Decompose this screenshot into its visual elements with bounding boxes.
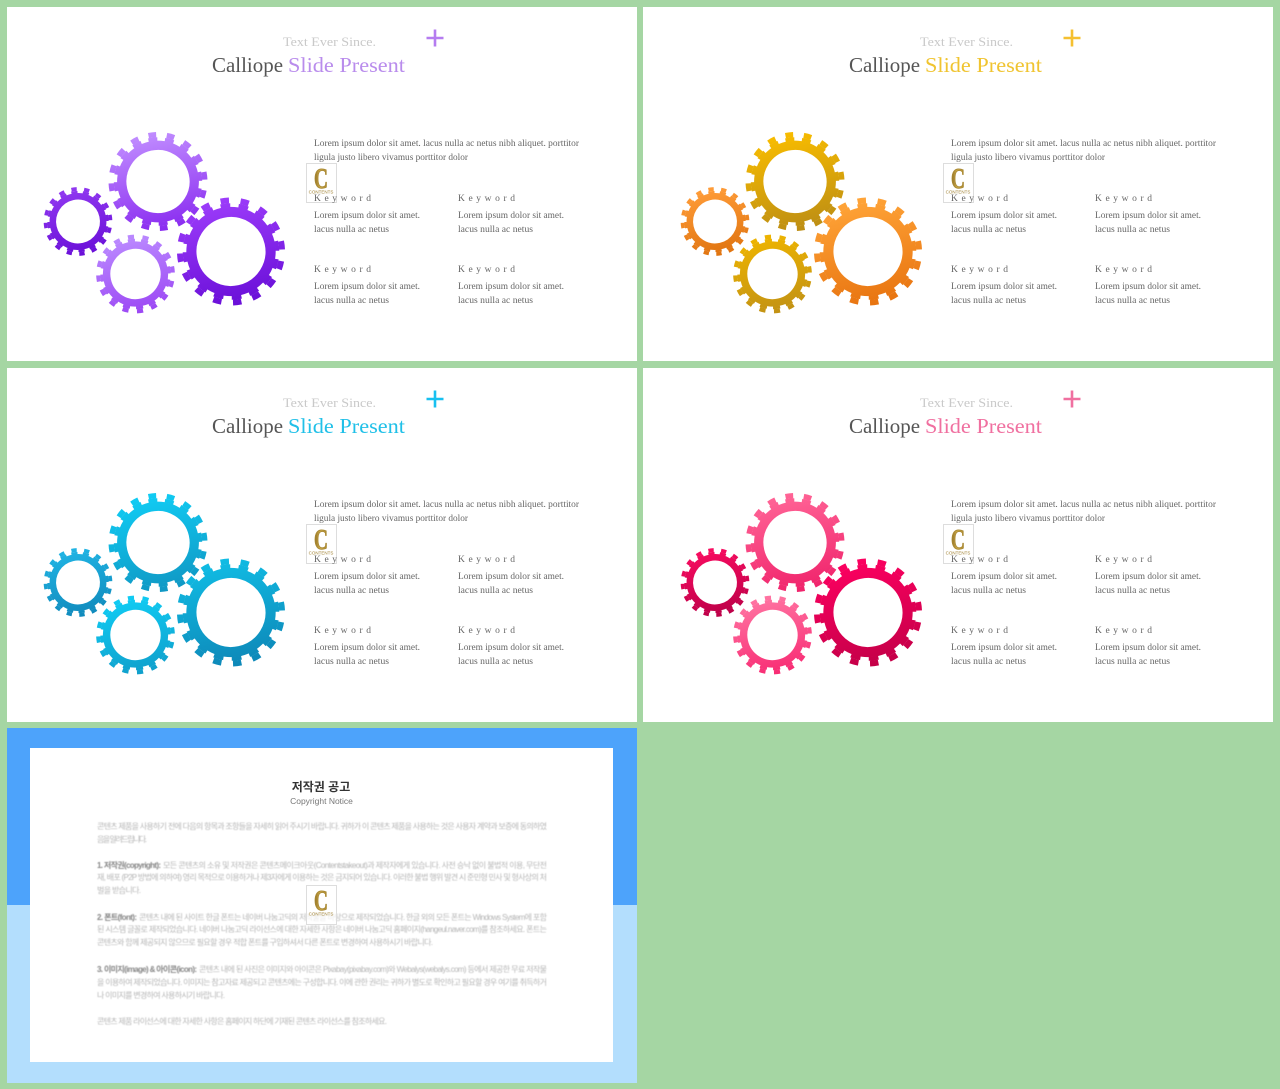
watermark logo: C xyxy=(314,164,328,195)
keyword block 1: Lorem ipsum dolor sit amet. xyxy=(314,211,420,221)
watermark logo: CONTENTS xyxy=(309,550,333,556)
panel: copyright notice xyxy=(7,728,637,1083)
keyword block 1: Keyword xyxy=(951,555,1008,565)
keyword block 1: Lorem ipsum dolor sit amet. xyxy=(314,572,420,582)
text block: intro xyxy=(314,500,580,524)
notice section 1: copyright: 재, 배포 (P2P 방법에 의하여) 영리 목적으로 이용하거나 제3자에게 이용하는 것은 금지되어 있습니다. 이러한 불법 행위 발견 시 준민형 민사 및 형사상의 처 xyxy=(97,872,547,882)
gear: top xyxy=(739,126,851,237)
panel: blue slide xyxy=(7,368,637,722)
title: Calliope xyxy=(212,53,283,77)
text block: intro: Lorem ipsum dolor sit amet. lacus nulla ac netus nibh aliquet. porttitor xyxy=(314,500,580,510)
title: Calliope xyxy=(849,414,920,438)
keyword block 4: lacus nulla ac netus xyxy=(1095,296,1170,306)
text block: intro xyxy=(951,500,1217,524)
notice subtitle: Copyright Notice xyxy=(290,796,353,806)
watermark logo: CONTENTS xyxy=(946,190,970,194)
keyword block 4: Keyword xyxy=(1095,265,1152,275)
gear: top xyxy=(739,487,851,598)
keyword block 2 xyxy=(458,194,564,235)
keyword block 3: Keyword xyxy=(951,265,1008,275)
watermark logo: CONTENTS xyxy=(946,550,970,556)
notice section 1: copyright: 벌을 받습니다. xyxy=(97,885,141,895)
keyword block 3: lacus nulla ac netus xyxy=(951,657,1026,667)
panel: pink slide xyxy=(643,368,1273,722)
gear: top xyxy=(102,126,214,237)
keyword block 1: Keyword xyxy=(951,194,1008,204)
notice intro xyxy=(97,821,548,844)
watermark logo xyxy=(306,164,336,202)
text block: intro: ligula justo libero vivamus porttitor dolor xyxy=(951,153,1106,163)
keyword block 2: lacus nulla ac netus xyxy=(458,225,533,235)
heading: subtitle: Text Ever Since. xyxy=(283,396,376,410)
notice section 2: font: 콘텐츠 내에 된 사이트 한글 폰트는 네이버 나눔고딕의 저작물을 바탕으로 제작되었습니다. 한글 외의 모든 폰트는 Windows System에 포함 xyxy=(139,912,548,922)
keyword block 1 xyxy=(314,555,420,596)
keyword block 4: Keyword xyxy=(458,265,515,275)
watermark logo: CONTENTS xyxy=(309,190,333,194)
keyword block 4: lacus nulla ac netus xyxy=(1095,657,1170,667)
notice intro: 콘텐츠 제품을 사용하기 전에 다음의 항목과 조항들을 자세히 읽어 주시기 바랍니다. 귀하가 이 콘텐츠 제품을 사용하는 것은 사용자 계약과 보증에 동의하였 xyxy=(97,821,548,831)
title: Calliope xyxy=(212,414,283,438)
keyword block 4: Lorem ipsum dolor sit amet. xyxy=(458,643,564,653)
keyword block 3: Keyword xyxy=(314,265,371,275)
keyword block 3: Keyword xyxy=(314,626,371,636)
keyword block 4: Keyword xyxy=(1095,626,1152,636)
notice section 2: font: 콘텐츠와 함께 제공되지 않으므로 필요할 경우 적합 폰트를 구입하셔서 다른 폰트로 변경하여 사용하시기 바랍니다. xyxy=(97,937,433,947)
keyword block 1: lacus nulla ac netus xyxy=(951,225,1026,235)
keyword block 2: Lorem ipsum dolor sit amet. xyxy=(458,211,564,221)
title accent: Slide Present xyxy=(925,53,1042,77)
watermark logo xyxy=(944,164,974,202)
keyword block 3 xyxy=(314,265,420,306)
watermark logo: C xyxy=(951,525,965,556)
keyword block 1 xyxy=(951,194,1057,235)
keyword block 1: Lorem ipsum dolor sit amet. xyxy=(951,572,1057,582)
keyword block 3: lacus nulla ac netus xyxy=(314,296,389,306)
notice section 1: copyright: 모든 콘텐츠의 소유 및 저작권은 콘텐츠메이크아웃(Contentstakeout)과 제작자에게 있습니다. 사전 승낙 없이 불법적 이용, 무단전 xyxy=(163,860,547,870)
keyword block 3 xyxy=(951,626,1057,667)
icon: plus xyxy=(426,390,444,408)
text block: intro: Lorem ipsum dolor sit amet. lacus nulla ac netus nibh aliquet. porttitor xyxy=(951,139,1217,149)
heading: subtitle: Text Ever Since. xyxy=(920,35,1013,49)
text block: intro: ligula justo libero vivamus porttitor dolor xyxy=(951,514,1106,524)
keyword block 3: Keyword xyxy=(951,626,1008,636)
notice title: 저작권 공고 xyxy=(292,779,350,794)
notice section 3: image and icon: 3. 이미지(image) & 아이콘(icon): xyxy=(97,964,197,974)
panel: orange slide xyxy=(643,7,1273,361)
keyword block 4: Lorem ipsum dolor sit amet. xyxy=(458,282,564,292)
keyword block 4 xyxy=(458,626,564,667)
gear: bottom xyxy=(728,591,817,679)
keyword block 4: Keyword xyxy=(458,626,515,636)
keyword block 2 xyxy=(458,555,564,596)
title: Calliope xyxy=(849,53,920,77)
text block: intro: Lorem ipsum dolor sit amet. lacus nulla ac netus nibh aliquet. porttitor xyxy=(314,139,580,149)
keyword block 2 xyxy=(1095,194,1201,235)
keyword block 2: Keyword xyxy=(458,555,515,565)
keyword block 3 xyxy=(951,265,1057,306)
keyword block 4 xyxy=(1095,265,1201,306)
gear: bottom xyxy=(91,230,180,318)
text block: intro xyxy=(951,139,1217,163)
gear: left xyxy=(39,544,117,621)
icon: plus xyxy=(1064,30,1080,46)
keyword block 3: Lorem ipsum dolor sit amet. xyxy=(951,282,1057,292)
keyword block 4 xyxy=(458,265,564,306)
keyword block 2: Keyword xyxy=(1095,194,1152,204)
keyword block 1: lacus nulla ac netus xyxy=(314,586,389,596)
keyword block 1: Keyword xyxy=(314,555,371,565)
keyword block 2: Lorem ipsum dolor sit amet. xyxy=(458,572,564,582)
notice section 3: image and icon: 을 이용하여 제작되었습니다. 이미지는 참고자료 제공되고 콘텐츠에는 구성합니다. 이에 관한 권리는 귀하가 별도로 확인하고 필요할 경우 여기를 취득하거 xyxy=(97,977,547,987)
keyword block 3: Lorem ipsum dolor sit amet. xyxy=(314,643,420,653)
keyword block 2: Lorem ipsum dolor sit amet. xyxy=(1095,211,1201,221)
watermark logo: CONTENTS xyxy=(309,912,333,916)
gear: left xyxy=(676,544,754,621)
title accent: Slide Present xyxy=(288,414,405,438)
keyword block 1 xyxy=(951,555,1057,596)
keyword block 2: lacus nulla ac netus xyxy=(1095,225,1170,235)
keyword block 2: lacus nulla ac netus xyxy=(1095,586,1170,596)
panel: purple slide xyxy=(7,7,637,361)
title accent: Slide Present xyxy=(288,53,405,77)
keyword block 3: Lorem ipsum dolor sit amet. xyxy=(314,282,420,292)
gear: bottom xyxy=(728,230,817,318)
keyword block 3 xyxy=(314,626,420,667)
keyword block 2: Lorem ipsum dolor sit amet. xyxy=(1095,572,1201,582)
notice section 3: image and icon xyxy=(97,964,547,1000)
watermark logo: C xyxy=(951,164,965,195)
text block: intro: ligula justo libero vivamus porttitor dolor xyxy=(314,514,469,524)
keyword block 1 xyxy=(314,194,420,235)
keyword block 1: lacus nulla ac netus xyxy=(951,586,1026,596)
heading: subtitle: Text Ever Since. xyxy=(920,396,1013,410)
watermark logo xyxy=(306,886,336,924)
watermark logo: C xyxy=(314,525,328,556)
gear: left xyxy=(676,183,754,260)
gear: bottom xyxy=(91,591,180,679)
keyword block 4 xyxy=(1095,626,1201,667)
watermark logo xyxy=(306,524,336,564)
keyword block 1: Lorem ipsum dolor sit amet. xyxy=(951,211,1057,221)
title accent: Slide Present xyxy=(925,414,1042,438)
gear: left xyxy=(39,183,117,260)
notice section 3: image and icon: 콘텐츠 내에 된 사진은 이미지와 아이콘은 Pixabay(pixabay.com)와 Webalys(webalys.com) 등에서 제공한 무료 저작물 xyxy=(199,964,547,974)
gear: right xyxy=(170,551,292,674)
text block: intro: Lorem ipsum dolor sit amet. lacus nulla ac netus nibh aliquet. porttitor xyxy=(951,500,1217,510)
keyword block 1: Keyword xyxy=(314,194,371,204)
text block: intro: ligula justo libero vivamus porttitor dolor xyxy=(314,153,469,163)
keyword block 2 xyxy=(1095,555,1201,596)
gear: right xyxy=(807,190,929,313)
notice section 2: font xyxy=(97,912,548,947)
notice footer: 콘텐츠 제품 라이선스에 대한 자세한 사항은 홈페이지 하단에 기재된 콘텐츠 라이선스를 참조하세요. xyxy=(97,1016,387,1026)
heading: subtitle: Text Ever Since. xyxy=(283,35,376,49)
notice section 2: font: 된 시스템 글꼴로 제작되었습니다. 네이버 나눔고딕 라이선스에 대한 자세한 사항은 네이버 나눔고딕 홈페이지(hangeul.naver.com)를 참조하세요. 폰트는 xyxy=(97,924,547,934)
icon: plus xyxy=(426,30,444,46)
keyword block 2: lacus nulla ac netus xyxy=(458,586,533,596)
keyword block 3: lacus nulla ac netus xyxy=(314,657,389,667)
icon: plus xyxy=(1064,390,1080,408)
keyword block 4: Lorem ipsum dolor sit amet. xyxy=(1095,282,1201,292)
keyword block 2: Keyword xyxy=(1095,555,1152,565)
gear: right xyxy=(170,190,292,313)
keyword block 4: lacus nulla ac netus xyxy=(458,657,533,667)
gear: top xyxy=(102,487,214,598)
keyword block 3: Lorem ipsum dolor sit amet. xyxy=(951,643,1057,653)
watermark logo xyxy=(944,524,974,564)
text block: intro xyxy=(314,139,580,163)
watermark logo: C xyxy=(314,886,328,917)
notice section 1: copyright xyxy=(97,860,547,895)
keyword block 1: lacus nulla ac netus xyxy=(314,225,389,235)
keyword block 3: lacus nulla ac netus xyxy=(951,296,1026,306)
notice section 1: copyright: 1. 저작권(copyright): xyxy=(97,860,161,870)
keyword block 2: Keyword xyxy=(458,194,515,204)
notice intro: 음을 알려드립니다. xyxy=(97,834,147,844)
notice section 2: font: 2. 폰트(font): xyxy=(97,913,137,922)
keyword block 4: Lorem ipsum dolor sit amet. xyxy=(1095,643,1201,653)
keyword block 4: lacus nulla ac netus xyxy=(458,296,533,306)
notice section 3: image and icon: 나 이미지를 변경하여 사용하시기 바랍니다. xyxy=(97,990,225,1000)
gear: right xyxy=(807,551,929,674)
